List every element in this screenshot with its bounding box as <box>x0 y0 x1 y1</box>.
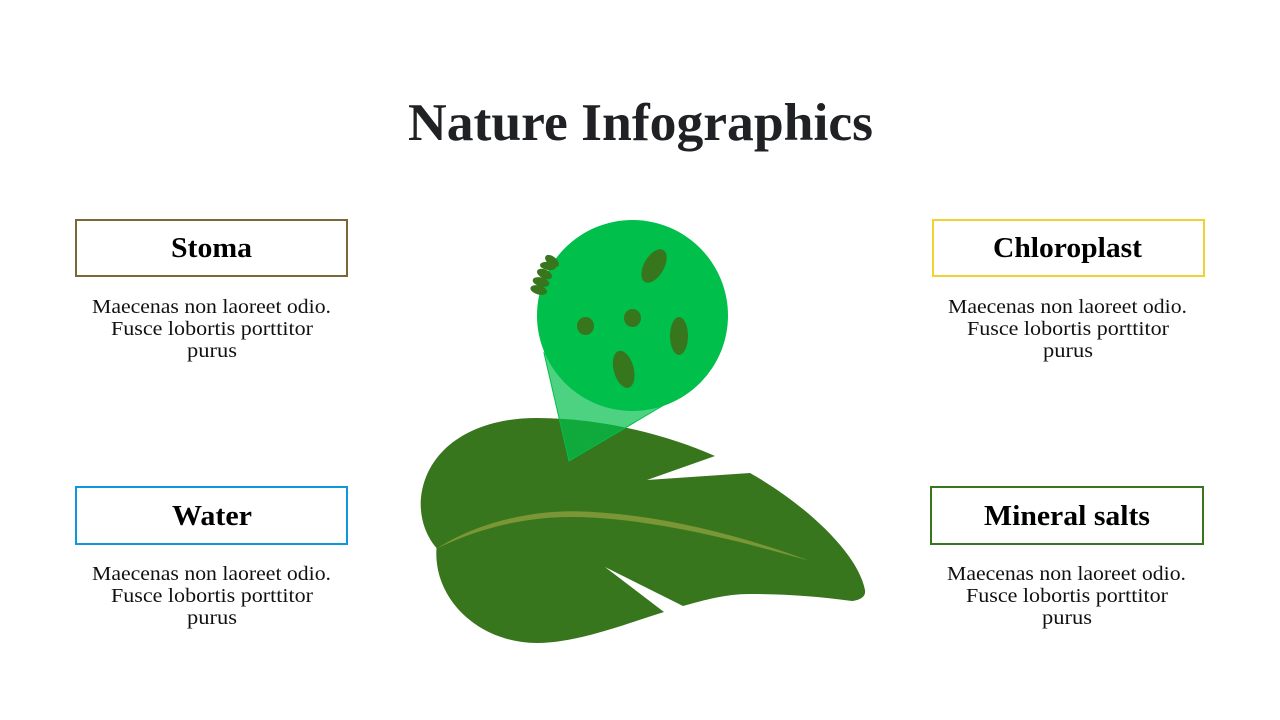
water description: Maecenas non laoreet odio. <box>92 563 331 585</box>
chloroplast description <box>948 296 1187 362</box>
title: Nature Infographics <box>408 94 873 152</box>
mineral salts description: purus <box>1042 607 1092 629</box>
stoma heading: Stoma <box>171 232 253 264</box>
magnifier beam <box>544 353 664 461</box>
water description <box>92 563 331 629</box>
panel: stoma <box>76 220 347 362</box>
mineral salts heading: Mineral salts <box>984 500 1150 532</box>
water description: purus <box>187 607 237 629</box>
stoma description: Fusce lobortis porttitor <box>111 318 313 340</box>
chloroplast organelles <box>577 245 688 390</box>
panel: chloroplast <box>933 220 1204 362</box>
mineral salts description <box>947 563 1186 629</box>
leaf body <box>421 418 865 643</box>
chloroplast description: Maecenas non laoreet odio. <box>948 296 1187 318</box>
panel: mineral salts <box>931 487 1203 629</box>
stoma description: Maecenas non laoreet odio. <box>92 296 331 318</box>
water heading: Water <box>172 500 252 532</box>
panel: water <box>76 487 347 629</box>
leaf illustration <box>421 418 865 643</box>
water heading box <box>76 487 347 544</box>
chloroplast description: Fusce lobortis porttitor <box>967 318 1169 340</box>
leaf midrib <box>437 511 810 561</box>
mineral salts description: Maecenas non laoreet odio. <box>947 563 1186 585</box>
cell circle <box>537 220 728 411</box>
chloroplast heading: Chloroplast <box>993 232 1142 264</box>
chloroplast heading box <box>933 220 1204 276</box>
stoma description <box>92 296 331 362</box>
stoma heading box <box>76 220 347 276</box>
magnified cell <box>529 220 728 461</box>
mineral salts description: Fusce lobortis porttitor <box>966 585 1168 607</box>
chloroplast description: purus <box>1043 340 1093 362</box>
mineral salts heading box <box>931 487 1203 544</box>
stoma description: purus <box>187 340 237 362</box>
water description: Fusce lobortis porttitor <box>111 585 313 607</box>
stoma cluster <box>529 253 561 297</box>
